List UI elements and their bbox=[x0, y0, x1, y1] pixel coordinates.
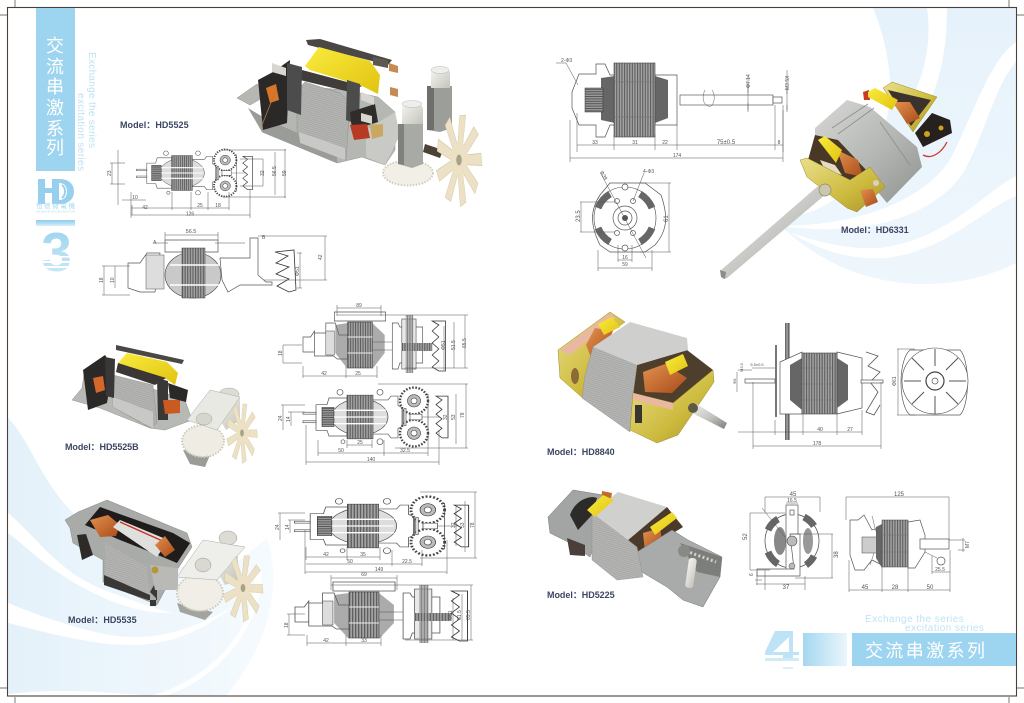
drawing: HD6331 end view: 23.5 bbox=[576, 210, 582, 222]
drawing: HD5525 plan view: 23 bbox=[107, 170, 113, 176]
drawing: HD5525B plan view: 140 bbox=[367, 457, 375, 463]
drawing: HD5525B plan view: 53 bbox=[451, 414, 457, 420]
drawing: HD6331 side view bbox=[556, 58, 791, 162]
drawing: HD6331 side view: 8 bbox=[778, 140, 781, 146]
drawing: HD5525 plan view: 18 bbox=[215, 203, 221, 209]
drawing: HD5225 end view: 45 bbox=[790, 492, 797, 498]
bottom-right title bar bbox=[852, 633, 1016, 666]
drawing: HD5535 side view: Φ51 bbox=[448, 610, 454, 620]
drawing: HD5535 plan view: 32 bbox=[451, 522, 457, 528]
HD logo: 恒德微電機 bbox=[36, 201, 76, 210]
drawing: HD5225 end view: 6 bbox=[749, 573, 755, 576]
drawing: HD5525 plan view: 10 bbox=[132, 195, 138, 201]
label: HD5525B: Model：HD5525B bbox=[65, 442, 139, 452]
drawing: HD5525 plan view: 59 bbox=[282, 170, 288, 176]
drawing: HD5525 plan view: 25 bbox=[197, 203, 203, 209]
drawing: HD5525 side view: 42 bbox=[318, 254, 324, 260]
drawing: HD5535 plan view: 53 bbox=[460, 522, 466, 528]
drawing: HD8840 side view: M3.5 bbox=[739, 362, 744, 372]
left bar vertical title: 串 bbox=[46, 77, 64, 97]
drawing: HD5525 plan view: 56.5 bbox=[272, 166, 278, 176]
bottom-right English subtitle bbox=[865, 614, 984, 634]
left bar vertical title: 系 bbox=[46, 119, 64, 139]
drawing: HD5225 end view: 37 bbox=[783, 585, 790, 591]
drawing: HD5525 side view: B bbox=[262, 235, 266, 241]
drawing: HD5525 side view bbox=[99, 229, 327, 298]
drawing: HD5525B side view: Φ51 bbox=[441, 340, 447, 350]
drawing: HD6331 side view: 31 bbox=[632, 140, 638, 146]
drawing: HD5225 side view: 25.5 bbox=[935, 567, 945, 573]
drawing: HD6331 side view: 2-Φ3 bbox=[561, 58, 572, 64]
vertical English subtitle: excitation series bbox=[75, 93, 86, 171]
label: HD5525: Model：HD5525 bbox=[120, 120, 189, 130]
drawing: HD6331 end view: Φ39 bbox=[598, 170, 608, 181]
drawing: HD6331 end view: 61 bbox=[664, 215, 670, 222]
drawing: HD5225 side view: 50 bbox=[927, 585, 934, 591]
drawing: HD5525B side view: 18 bbox=[278, 350, 284, 356]
drawing: HD5535 plan view: 42 bbox=[323, 552, 329, 558]
left bar vertical title bbox=[46, 36, 64, 158]
drawing: HD5525B side view bbox=[278, 303, 468, 378]
drawing: HD5225 side view: M7 bbox=[965, 541, 971, 548]
label: HD5225: Model：HD5225 bbox=[547, 590, 615, 600]
drawing: HD5525 side view: Φ51 bbox=[295, 266, 301, 276]
drawing: HD5525 side view: A bbox=[153, 240, 157, 246]
drawing: HD5525 plan view: 42 bbox=[142, 205, 148, 211]
photo: HD5535 motor bbox=[65, 500, 267, 628]
photo: HD5525B motor bbox=[72, 345, 261, 469]
label: HD6331: Model：HD6331 bbox=[841, 225, 909, 235]
drawing: HD5525 side view: 56.5 bbox=[186, 229, 196, 235]
left bar vertical title: 激 bbox=[46, 98, 64, 118]
drawing: HD5525B plan view: 50 bbox=[338, 448, 344, 454]
drawing: HD5535 side view: 42 bbox=[323, 638, 329, 644]
drawing: HD6331 end view bbox=[576, 169, 671, 271]
drawing: HD6331 side view: Φ7.14 bbox=[746, 74, 752, 88]
drawing: HD5535 side view: 33 bbox=[361, 638, 367, 644]
drawing: HD5535 plan view: 50 bbox=[347, 559, 353, 565]
drawing: HD5525B plan view: 78 bbox=[460, 412, 466, 418]
drawing: HD5535 plan view: 24 bbox=[275, 524, 281, 530]
drawing: HD8840 side view: Φ8 bbox=[732, 378, 737, 384]
left bar vertical title: 流 bbox=[46, 57, 64, 77]
left title bar bbox=[36, 8, 75, 171]
drawing: HD8840 side view: 5.5±0.5 bbox=[750, 362, 764, 367]
bottom-right English subtitle: excitation series bbox=[905, 623, 984, 634]
drawing: HD5525B plan view: 32 bbox=[443, 414, 449, 420]
section number 3: 3 bbox=[41, 221, 72, 283]
drawing: HD5525 plan view: 126 bbox=[186, 212, 194, 218]
drawing: HD5535 plan view: 14 bbox=[285, 524, 291, 530]
drawing: HD5225 end view: 52 bbox=[743, 533, 749, 540]
drawing: HD5525B plan view: 25 bbox=[357, 440, 363, 446]
drawing: HD6331 side view: 174 bbox=[673, 153, 681, 159]
drawing: HD8840 side view: 178 bbox=[813, 441, 821, 447]
bottom-right title bar: 交流串激系列 bbox=[865, 641, 987, 661]
photo: HD5525 motor bbox=[237, 39, 486, 213]
drawing: HD5525B side view: 42 bbox=[321, 371, 327, 377]
drawing: HD6331 end view: 16 bbox=[622, 255, 628, 261]
drawing: HD5525B side view: 25 bbox=[355, 371, 361, 377]
drawing: HD5525B plan view: 24 bbox=[278, 415, 284, 421]
drawing: HD5525 plan view bbox=[107, 149, 288, 218]
label: HD8840: Model：HD8840 bbox=[547, 447, 615, 457]
drawing: HD5225 side view: 125 bbox=[894, 492, 905, 498]
drawing: HD5535 plan view: 22.5 bbox=[402, 559, 412, 565]
drawing: HD8840 side view bbox=[732, 323, 883, 449]
drawing: HD8840 side view: 40 bbox=[817, 427, 823, 433]
drawing: HD5525B plan view: 32.5 bbox=[400, 448, 410, 454]
drawing: HD5225 side view bbox=[846, 492, 971, 592]
drawing: HD5525B plan view: 14 bbox=[286, 416, 292, 422]
drawing: HD5525B side view: 51.5 bbox=[451, 340, 457, 350]
label: HD5535: Model：HD5535 bbox=[68, 615, 137, 625]
drawing: HD6331 end view: 59 bbox=[622, 262, 628, 268]
vertical English subtitle: Exchange the series bbox=[86, 52, 97, 148]
drawing: HD8840 fan end view bbox=[892, 348, 968, 415]
HD logo bbox=[36, 179, 76, 214]
vertical English subtitle bbox=[75, 52, 97, 171]
drawing: HD5535 plan view: 35 bbox=[360, 552, 366, 558]
drawing: HD5535 side view: 51.5 bbox=[457, 610, 463, 620]
drawing: HD5525B side view: 89 bbox=[356, 303, 362, 309]
drawing: HD5535 plan view bbox=[275, 492, 477, 574]
left bar vertical title: 列 bbox=[46, 138, 64, 158]
drawing: HD5225 side view: 45 bbox=[862, 585, 869, 591]
HD logo: HANDER MICROMOTOR bbox=[36, 210, 75, 214]
drawing: HD6331 side view: M3.5X bbox=[785, 75, 791, 90]
drawing: HD6331 side view: 75±0.5 bbox=[717, 140, 736, 146]
section number 4 bbox=[765, 631, 847, 669]
left bar vertical title: 交 bbox=[46, 36, 64, 56]
bottom-right English subtitle: Exchange the series bbox=[865, 614, 964, 625]
drawing: HD5225 side view: 28 bbox=[892, 585, 899, 591]
drawing: HD5535 plan view: 149 bbox=[375, 567, 383, 573]
drawing: HD5535 side view bbox=[284, 572, 473, 646]
drawing: HD5225 end view: 16.5 bbox=[787, 498, 797, 504]
drawing: HD5525B side view: 65.5 bbox=[462, 338, 468, 348]
drawing: HD5535 side view: 69 bbox=[361, 572, 367, 578]
photo: HD6331 motor bbox=[720, 82, 952, 279]
photo: HD5225 motor bbox=[548, 490, 722, 607]
drawing: HD6331 side view: 33 bbox=[592, 140, 598, 146]
drawing: HD5525B plan view bbox=[278, 384, 468, 465]
drawing: HD5535 plan view: 78 bbox=[470, 522, 476, 528]
drawing: HD5535 side view: 18 bbox=[284, 622, 290, 628]
drawing: HD5525 plan view: 32 bbox=[260, 170, 266, 176]
drawing: HD8840 side view: 27 bbox=[847, 427, 853, 433]
drawing: HD5225 end view: 38 bbox=[834, 551, 840, 558]
drawing: HD5525 side view: 18 bbox=[99, 277, 105, 283]
drawing: HD5535 side view: 65.5 bbox=[466, 610, 472, 620]
drawing: HD6331 side view: 22 bbox=[662, 140, 668, 146]
drawing: HD8840 fan end view: Φ61 bbox=[892, 376, 898, 386]
drawing: HD5525 side view: 10 bbox=[110, 277, 116, 283]
drawing: HD6331 end view: 4-Φ3 bbox=[643, 169, 654, 175]
photo: HD8840 motor bbox=[558, 312, 727, 443]
drawing: HD5225 end view bbox=[743, 492, 840, 591]
